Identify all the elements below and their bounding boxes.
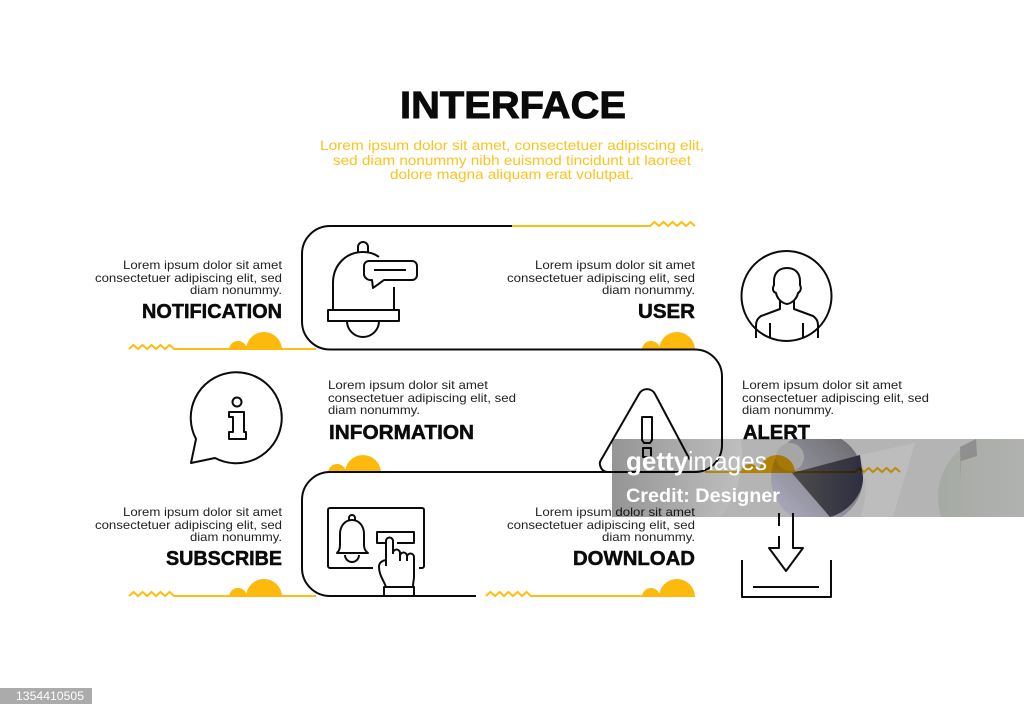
panel: information text (328, 378, 516, 444)
panel: user text: Lorem ipsum dolor sit amet (535, 258, 696, 272)
icon: subscribe bell and pointing hand (328, 508, 424, 596)
panel: user text: USER (638, 301, 696, 323)
subtitle text (320, 137, 704, 182)
image id tag (0, 688, 92, 704)
panel: user text: consectetuer adipiscing elit, sed (507, 271, 695, 285)
panel: notification text: diam nonummy. (190, 283, 282, 297)
icon: alert triangle (600, 389, 690, 472)
panel: alert text: ALERT (743, 422, 810, 444)
panel: download text (507, 505, 696, 570)
panel: information text: Lorem ipsum dolor sit amet (328, 378, 489, 392)
panel: information text: consectetuer adipiscing elit, sed (328, 391, 516, 405)
panel: subscribe text: diam nonummy. (190, 530, 282, 544)
panel: notification text: NOTIFICATION (142, 301, 282, 323)
watermark logo text: images (688, 446, 767, 476)
icon: information speech bubble (191, 372, 282, 463)
panel: subscribe text: SUBSCRIBE (166, 548, 282, 570)
yellow connector lines and decorations (129, 222, 900, 597)
panel: download text: consectetuer adipiscing elit, sed (507, 518, 695, 532)
panel: subscribe text (95, 505, 283, 570)
panel: information text: INFORMATION (329, 422, 474, 444)
title: INTERFACE (400, 85, 626, 127)
panel: alert text: diam nonummy. (742, 403, 834, 417)
image id tag: 1354410505 (16, 691, 84, 703)
watermark logo text (626, 446, 767, 476)
watermark band (612, 439, 1024, 517)
subtitle text: Lorem ipsum dolor sit amet, consectetuer adipiscing elit, (320, 137, 704, 153)
icon: bell with speech bubble (328, 242, 417, 337)
icon: user avatar (742, 251, 832, 341)
icon: download arrow into tray (742, 513, 831, 597)
panel: subscribe text: consectetuer adipiscing elit, sed (95, 518, 282, 532)
subtitle text: dolore magna aliquam erat volutpat. (390, 166, 634, 182)
panel: notification text (95, 258, 283, 323)
panel: user text (507, 258, 696, 323)
black winding outline (302, 226, 722, 596)
panel: user text: diam nonummy. (602, 283, 695, 297)
panel: download text: DOWNLOAD (573, 548, 695, 570)
panel: subscribe text: Lorem ipsum dolor sit amet (123, 505, 283, 519)
watermark logo text: getty (626, 446, 689, 476)
panel: download text: Lorem ipsum dolor sit amet (535, 505, 696, 519)
panel: notification text: Lorem ipsum dolor sit amet (123, 258, 283, 272)
watermark credit text: Credit: Designer (626, 486, 781, 507)
panel: notification text: consectetuer adipiscing elit, sed (95, 271, 282, 285)
panel: alert text: Lorem ipsum dolor sit amet (742, 378, 903, 392)
subtitle text: sed diam nonummy nibh euismod tincidunt ut laoreet (333, 152, 691, 168)
panel: alert text (742, 378, 929, 444)
panel: alert text: consectetuer adipiscing elit, sed (742, 391, 929, 405)
panel: download text: diam nonummy. (602, 530, 695, 544)
panel: information text: diam nonummy. (328, 403, 420, 417)
